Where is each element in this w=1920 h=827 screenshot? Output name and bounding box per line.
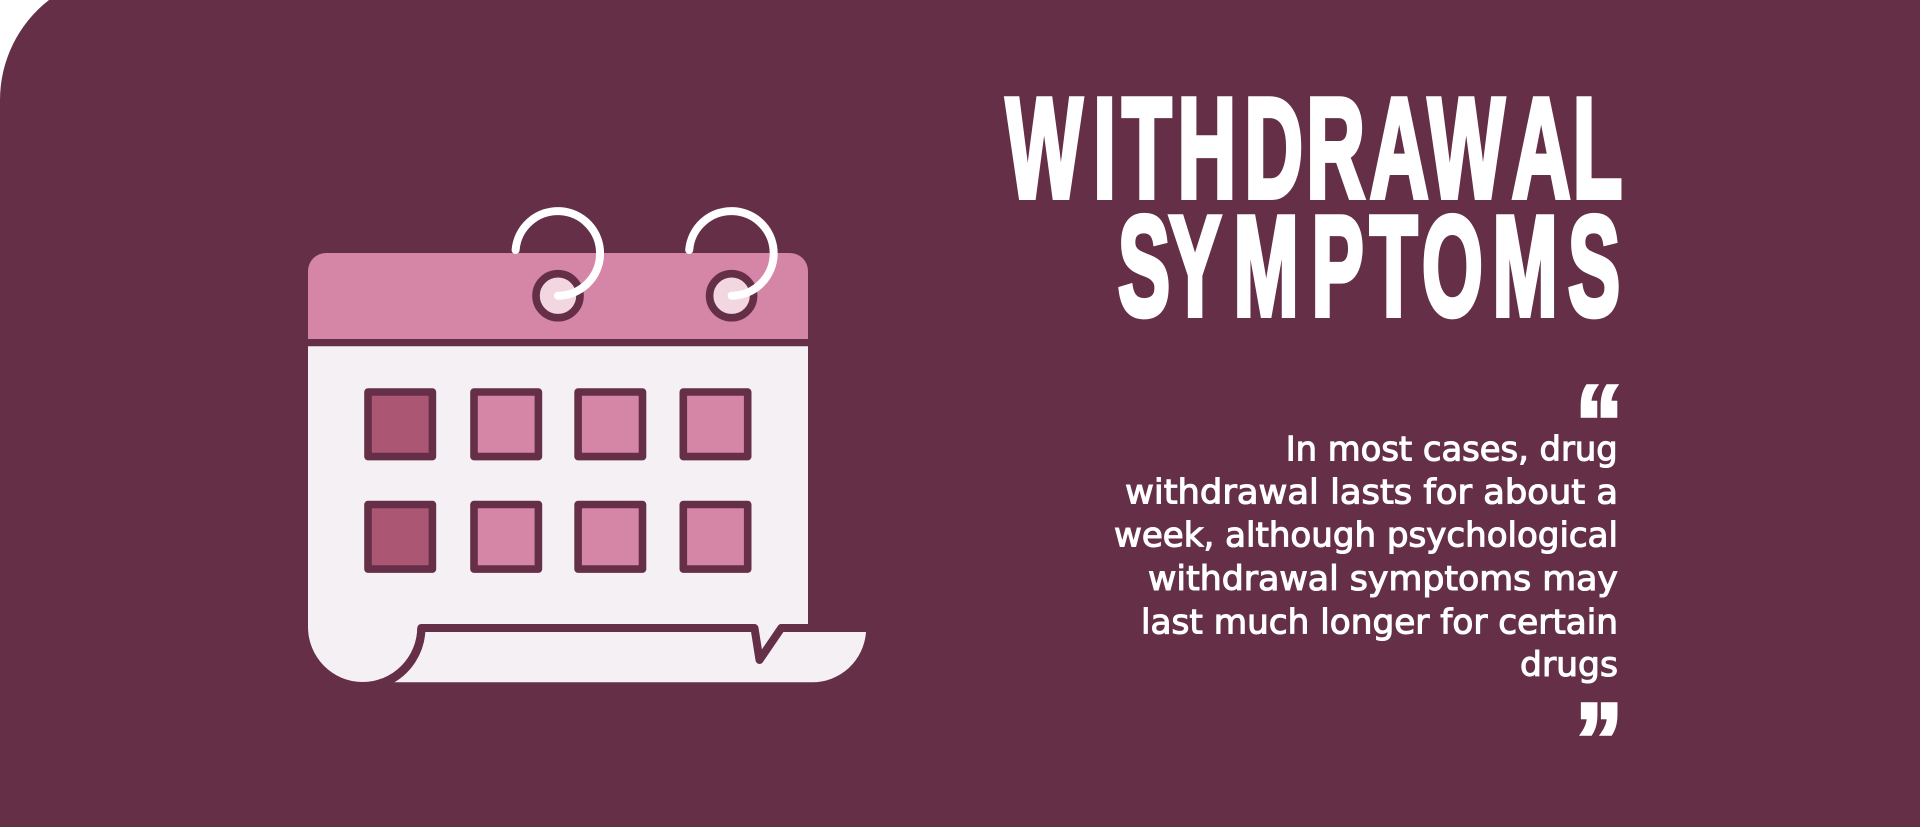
binding hole right <box>710 274 754 318</box>
quote text: drugs <box>1520 645 1618 685</box>
quote text: withdrawal lasts for about a <box>1125 472 1618 512</box>
quote text: withdrawal symptoms may <box>1148 559 1618 599</box>
binding ring right <box>689 211 774 296</box>
title <box>1006 69 1622 346</box>
opening quote mark: “ <box>1575 364 1623 482</box>
calendar fold outline <box>386 628 808 682</box>
quote text: last much longer for certain <box>1141 602 1618 642</box>
icon: calendar <box>308 211 866 682</box>
title: SYMPTOMS <box>1118 187 1620 346</box>
calendar page body <box>308 346 808 682</box>
quote text: In most cases, drug <box>1286 430 1618 470</box>
binding ring left <box>516 211 600 296</box>
title: WITHDRAWAL <box>1006 69 1622 228</box>
calendar curled page <box>394 632 866 682</box>
quote text: week, although psychological <box>1114 516 1618 556</box>
closing quote mark: ” <box>1575 682 1623 800</box>
calendar header <box>308 253 808 339</box>
date squares <box>368 392 748 569</box>
binding hole left <box>536 274 580 318</box>
quote text <box>1114 430 1618 685</box>
